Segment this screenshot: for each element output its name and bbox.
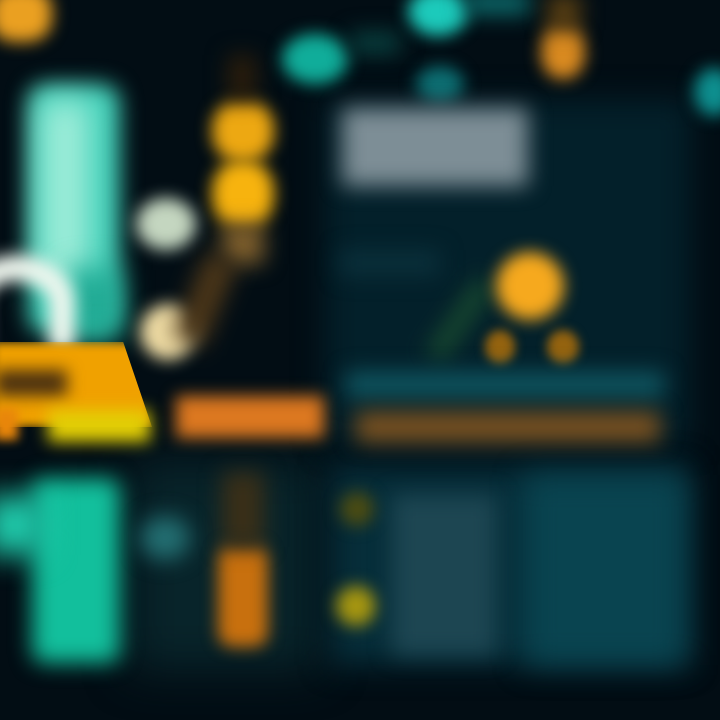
icon: white arc (0, 255, 75, 350)
icon: pale blob (136, 198, 196, 250)
chart: orange lower stem (222, 472, 264, 547)
icon: teal link (350, 32, 400, 54)
arrow: brown diagonal connector (172, 252, 238, 348)
icon: dim yellow dot (340, 492, 374, 526)
icon: orange top column (541, 25, 585, 79)
chart: orange lower column (218, 545, 268, 647)
icon: small orange circle left (485, 330, 515, 364)
text block: short intro (340, 250, 440, 276)
icon: teal top trail (465, 0, 530, 14)
panel: lower content card (330, 465, 690, 665)
icon: small orange circle right (547, 330, 579, 364)
icon: top-left orange blob (0, 0, 52, 42)
text row: teal line (346, 372, 664, 398)
chart: lower mint wing (0, 495, 45, 555)
chart: mint column shade (70, 270, 120, 340)
icon: teal lower blob (140, 516, 190, 560)
icon: teal blob (282, 34, 348, 84)
chart: yellow column upper (212, 100, 274, 162)
panel: orange block (0, 342, 152, 427)
icon: cream blob (140, 304, 196, 360)
chart: lower mint column (32, 478, 120, 663)
icon: yellow circle (496, 252, 564, 320)
heading: orange bar (176, 396, 324, 438)
text row: orange line (356, 412, 660, 442)
panel: lower right panel (525, 475, 685, 665)
chart: big mint column (28, 84, 120, 334)
panel: right content card (325, 100, 690, 445)
background: left column glow (130, 460, 320, 670)
icon: yellow dot (336, 586, 376, 626)
chart: yellow column lower (212, 160, 274, 228)
icon: teal small blob (416, 66, 464, 102)
chart: yellow column base (222, 224, 264, 264)
icon: yellow strip (48, 410, 150, 442)
title block (342, 108, 528, 186)
panel: orange block inner (0, 370, 67, 396)
icon: teal top blob (408, 0, 468, 36)
chart: yellow column stem (228, 55, 256, 100)
text block: lower list (392, 495, 497, 655)
chart: green line (426, 277, 494, 363)
icon: orange top stem (548, 0, 580, 30)
icon: left orange fragment (0, 408, 18, 440)
chart: mint column highlight (40, 100, 90, 280)
icon: teal right blob (694, 68, 720, 116)
